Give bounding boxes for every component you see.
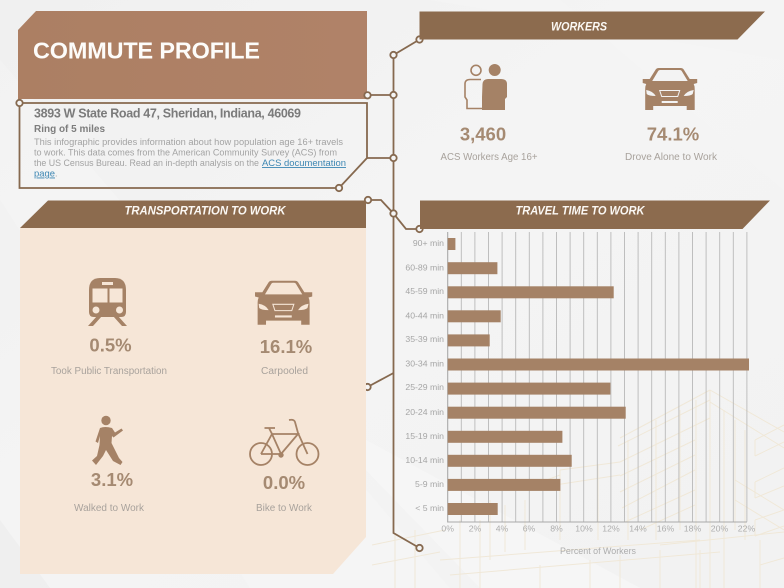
stat: walked: 3.1% xyxy=(91,469,133,490)
header: commute profile xyxy=(18,11,367,99)
stat: bike: 0.0% xyxy=(263,472,305,493)
stat: workers age 16+: 3,460 xyxy=(460,124,506,144)
category labels xyxy=(405,238,444,513)
ring: Ring of 5 miles xyxy=(34,123,105,135)
axis tick labels: 4% xyxy=(496,524,509,534)
category labels: 5-9 min xyxy=(415,479,444,489)
stat: drove alone: Drove Alone to Work xyxy=(625,152,718,163)
category labels: 40-44 min xyxy=(405,310,444,320)
axis tick labels: 10% xyxy=(575,524,593,534)
panel: address and description xyxy=(16,100,367,191)
category labels: 90+ min xyxy=(413,238,444,248)
stat: walked: Walked to Work xyxy=(74,503,145,514)
stat: bike: Bike to Work xyxy=(256,503,313,514)
icon: car xyxy=(643,68,697,110)
stat: workers age 16+ xyxy=(440,64,538,163)
title: COMMUTE PROFILE xyxy=(33,38,260,64)
banner: travel time to work xyxy=(420,200,770,229)
stat: workers age 16+: ACS Workers Age 16+ xyxy=(440,152,538,163)
panel: transportation to work xyxy=(20,200,366,574)
banner: workers xyxy=(420,12,765,40)
axis tick labels: 8% xyxy=(550,524,563,534)
icon: walking person xyxy=(92,416,123,465)
axis tick labels: 2% xyxy=(469,524,482,534)
axis title: Percent of Workers xyxy=(560,546,636,556)
bar chart: travel time to work xyxy=(405,232,755,556)
category labels: 30-34 min xyxy=(405,358,444,368)
description: . xyxy=(55,168,58,178)
stat: drove alone: 74.1% xyxy=(647,124,699,144)
icon: bicycle xyxy=(250,420,318,465)
category labels: < 5 min xyxy=(415,503,444,513)
grid lines xyxy=(448,232,747,522)
axis tick labels xyxy=(441,524,755,534)
axis tick labels: 20% xyxy=(711,524,728,534)
icon: two people xyxy=(465,64,507,110)
stat: carpooled: Carpooled xyxy=(261,366,308,377)
banner: transportation to work xyxy=(20,200,366,228)
axis tick labels: 0% xyxy=(441,524,454,534)
category labels: 20-24 min xyxy=(405,407,444,417)
category labels: 35-39 min xyxy=(405,334,444,344)
category labels: 15-19 min xyxy=(405,431,444,441)
stat: drove alone xyxy=(625,68,718,163)
banner: transportation to work: TRANSPORTATION TO WORK xyxy=(124,206,286,218)
stat: public transportation: 0.5% xyxy=(89,334,132,356)
icon: car xyxy=(255,281,312,325)
axis tick labels: 6% xyxy=(523,524,536,534)
icon: train xyxy=(88,278,127,326)
category labels: 10-14 min xyxy=(405,455,444,465)
stat: carpooled: 16.1% xyxy=(260,336,312,357)
category labels: 60-89 min xyxy=(405,262,444,272)
banner: travel time to work: TRAVEL TIME TO WORK xyxy=(516,206,645,218)
banner: workers: WORKERS xyxy=(551,22,607,34)
axis tick labels: 12% xyxy=(602,524,620,534)
stat: walked xyxy=(74,416,145,514)
axis tick labels: 16% xyxy=(657,524,674,534)
axis tick labels: 22% xyxy=(738,524,755,534)
description: the US Census Bureau. Read an in-depth analysis on the xyxy=(34,158,259,168)
axis tick labels: 18% xyxy=(684,524,701,534)
bars xyxy=(448,238,749,515)
stat: public transportation: Took Public Transportation xyxy=(51,366,167,377)
description: to work. This data comes from the American Community Survey (ACS) from xyxy=(34,148,337,158)
stat: carpooled xyxy=(255,281,312,377)
description: page xyxy=(34,168,55,178)
stat: public transportation xyxy=(51,278,167,377)
address: 3893 W State Road 47, Sheridan, Indiana, 46069 xyxy=(34,106,301,120)
description: This infographic provides information about how population age 16+ travels xyxy=(34,137,344,147)
connector lines xyxy=(364,36,423,551)
stat: bike xyxy=(250,420,318,514)
axis tick labels: 14% xyxy=(629,524,647,534)
category labels: 25-29 min xyxy=(405,382,444,392)
description: ACS documentation xyxy=(262,158,346,168)
description xyxy=(34,137,346,178)
category labels: 45-59 min xyxy=(405,286,444,296)
